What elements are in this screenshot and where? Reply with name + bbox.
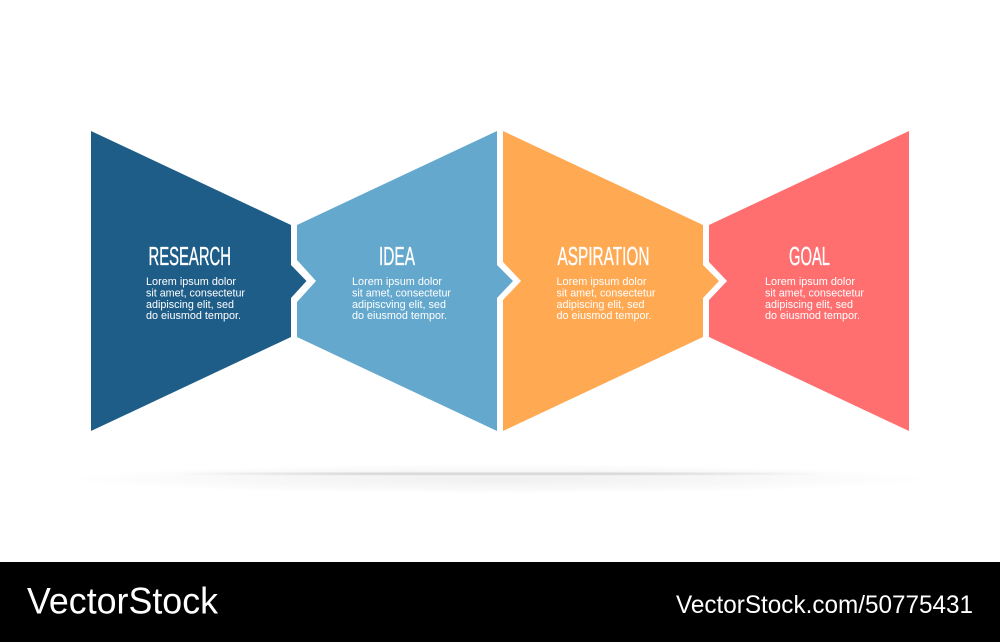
shape: research arrow	[91, 131, 306, 431]
text block: idea description: Lorem ipsum dolor	[352, 276, 442, 288]
shape: aspiration arrow	[503, 131, 719, 431]
text block: goal description: sit amet, consectetur	[765, 288, 864, 300]
text block: research description	[146, 276, 245, 322]
heading: research: RESEARCH	[148, 241, 231, 271]
panel: research	[91, 131, 306, 431]
image url: VectorStock.com/50775431	[676, 591, 973, 619]
brand name: VectorStock	[27, 580, 218, 622]
panel: goal	[709, 131, 909, 431]
text block: aspiration description: Lorem ipsum dolor	[556, 276, 647, 288]
text block: goal description: do eiusmod tempor.	[765, 310, 860, 322]
shape: idea arrow	[297, 131, 513, 431]
text block: goal description	[765, 276, 864, 322]
text block: aspiration description: sit amet, consectetur	[556, 288, 656, 300]
heading: aspiration: ASPIRATION	[558, 241, 650, 271]
heading: idea: IDEA	[379, 241, 415, 271]
floor shadow	[65, 464, 935, 494]
text block: idea description: adipiscving elit, sed	[352, 299, 446, 311]
text block: research description: adipiscing elit, sed	[146, 299, 234, 311]
shape: goal arrow	[709, 131, 909, 431]
text block: research description: Lorem ipsum dolor	[146, 276, 236, 288]
text block: aspiration description	[556, 276, 656, 322]
heading: goal: GOAL	[789, 241, 830, 271]
panel: idea	[297, 131, 513, 431]
text block: goal description: adipiscing elit, sed	[765, 299, 853, 311]
text block: research description: do eiusmod tempor.	[146, 310, 241, 322]
text block: aspiration description: adipiscing elit, sed	[556, 299, 644, 311]
text block: aspiration description: do eiusmod tempor.	[556, 310, 652, 322]
text block: goal description: Lorem ipsum dolor	[765, 276, 855, 288]
panel: aspiration	[503, 131, 719, 431]
text block: research description: sit amet, consectetur	[146, 288, 245, 300]
watermark band	[0, 562, 1000, 642]
text block: idea description: sit amet, consectetur	[352, 288, 451, 300]
text block: idea description: do eiusmod tempor.	[352, 310, 447, 322]
text block: idea description	[352, 276, 451, 322]
